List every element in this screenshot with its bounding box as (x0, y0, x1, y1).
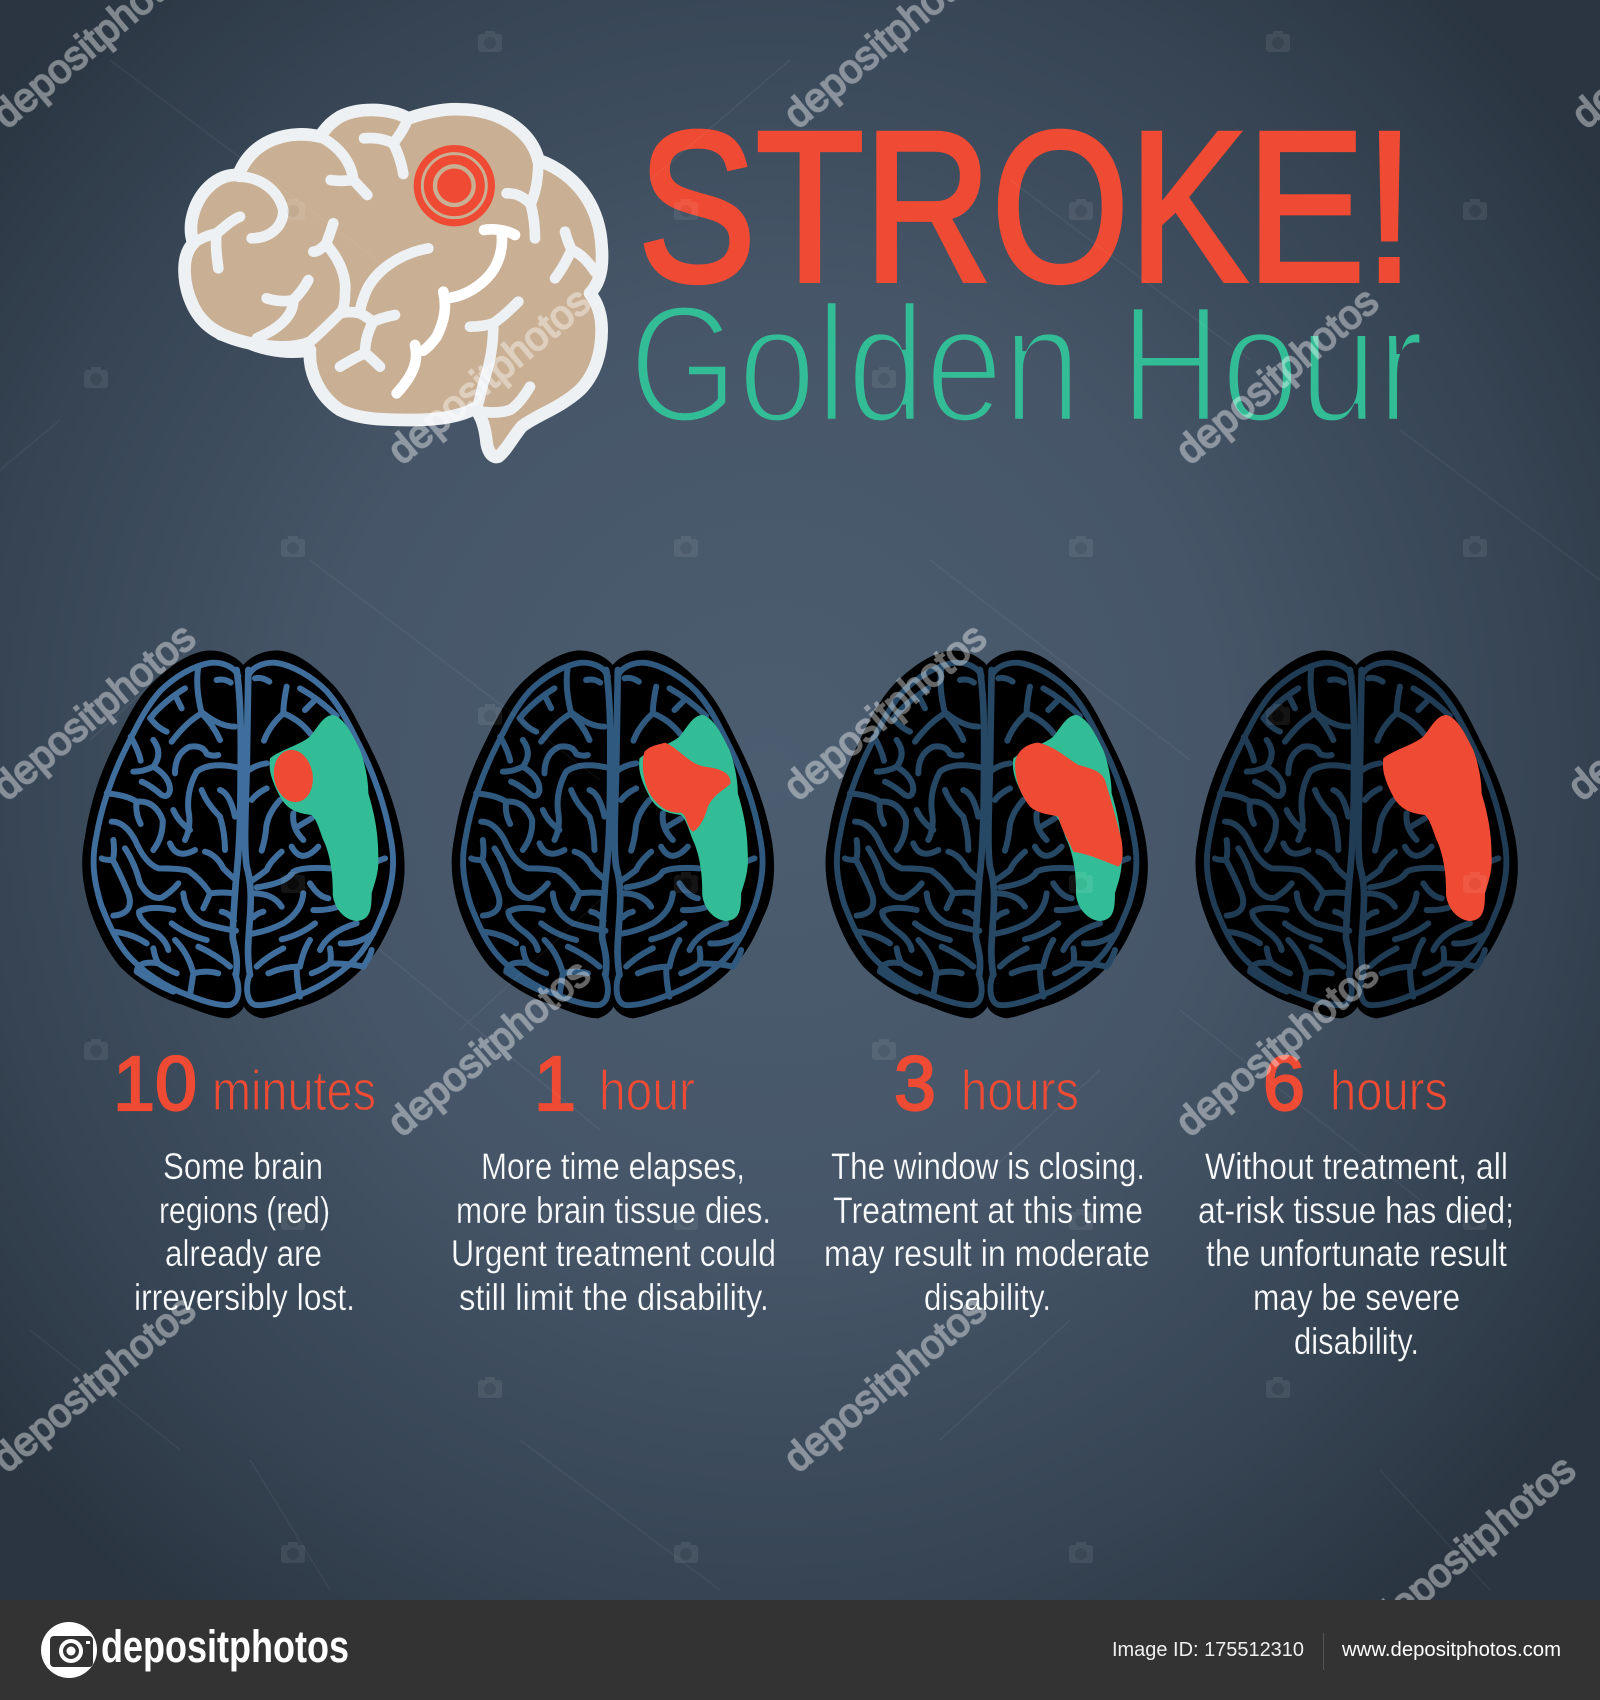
text block: 10 minutes description: already are (165, 1233, 322, 1274)
text block: 10 minutes description (134, 1146, 355, 1318)
time label: 1 hour: 1 (534, 1041, 576, 1127)
icon: depositphotos camera logo (41, 1622, 97, 1678)
watermark: depositphotos text: depositphotos (1365, 1447, 1584, 1641)
footer logo wordmark: depositphotos (101, 1621, 349, 1672)
time label: 3 hours: 3 (894, 1041, 936, 1127)
text block: 3 hours description: may result in moderate (824, 1233, 1150, 1274)
text block: 10 minutes description: irreversibly lost. (134, 1277, 355, 1318)
time label: 6 hours (1263, 1041, 1448, 1127)
time label: 6 hours: 6 (1263, 1041, 1305, 1127)
time label: 1 hour: hour (599, 1059, 695, 1123)
text block: 6 hours description: disability. (1294, 1321, 1419, 1362)
brain scan: 10 minutes (82, 650, 405, 1018)
title: STROKE!: STROKE! (638, 88, 1414, 326)
time label: 6 hours: hours (1330, 1059, 1448, 1123)
brain scan: 1 hour (452, 650, 774, 1018)
text block: 1 hour description: More time elapses, (481, 1146, 745, 1187)
time label: 10 minutes: minutes (212, 1059, 376, 1123)
watermark: depositphotos text: depositphotos (776, 615, 995, 809)
brain scan: 6 hours (1195, 650, 1518, 1018)
time label: 3 hours (894, 1041, 1079, 1127)
text block: 1 hour description (451, 1146, 776, 1318)
text block: 6 hours description: the unfortunate result (1206, 1233, 1508, 1274)
text block: 1 hour description: Urgent treatment could (451, 1233, 776, 1274)
time label: 3 hours: hours (961, 1059, 1079, 1123)
footer image id: Image ID: 175512310 (1112, 1639, 1304, 1661)
watermark: depositphotos text: depositphotos (776, 1287, 995, 1481)
time label: 10 minutes (113, 1041, 376, 1127)
watermark: depositphotos text: depositphotos (380, 279, 599, 473)
footer site url: www.depositphotos.com (1341, 1639, 1561, 1661)
text block: 3 hours description: The window is closing. (831, 1146, 1145, 1187)
text block: 3 hours description (824, 1146, 1150, 1318)
footer bar (0, 1600, 1600, 1700)
watermark: camera marks (84, 31, 1487, 1563)
text block: 10 minutes description: regions (red) (159, 1190, 330, 1231)
watermark: depositphotos text: depositphotos (380, 951, 599, 1145)
text block: 3 hours description: Treatment at this time (833, 1190, 1143, 1231)
text block: 3 hours description: disability. (924, 1277, 1051, 1318)
time label: 10 minutes: 10 (113, 1041, 197, 1127)
subtitle: Golden Hour: Golden Hour (629, 272, 1424, 458)
time label: 1 hour (534, 1041, 695, 1127)
text block: 6 hours description: may be severe (1253, 1277, 1460, 1318)
text block: 6 hours description: at-risk tissue has died; (1198, 1190, 1514, 1231)
text block: 6 hours description: Without treatment, all (1205, 1146, 1508, 1187)
icon: side-view brain with stroke target (185, 109, 602, 457)
text block: 6 hours description (1198, 1146, 1514, 1362)
watermark: depositphotos text: depositphotos (1168, 279, 1387, 473)
watermark: depositphotos text: depositphotos (1168, 951, 1387, 1145)
text block: 10 minutes description: Some brain (163, 1146, 323, 1187)
brain scan: 3 hours (825, 650, 1148, 1018)
text block: 1 hour description: more brain tissue dies. (456, 1190, 771, 1231)
text block: 1 hour description: still limit the disability. (459, 1277, 769, 1318)
icon: stroke target rings (414, 145, 495, 226)
